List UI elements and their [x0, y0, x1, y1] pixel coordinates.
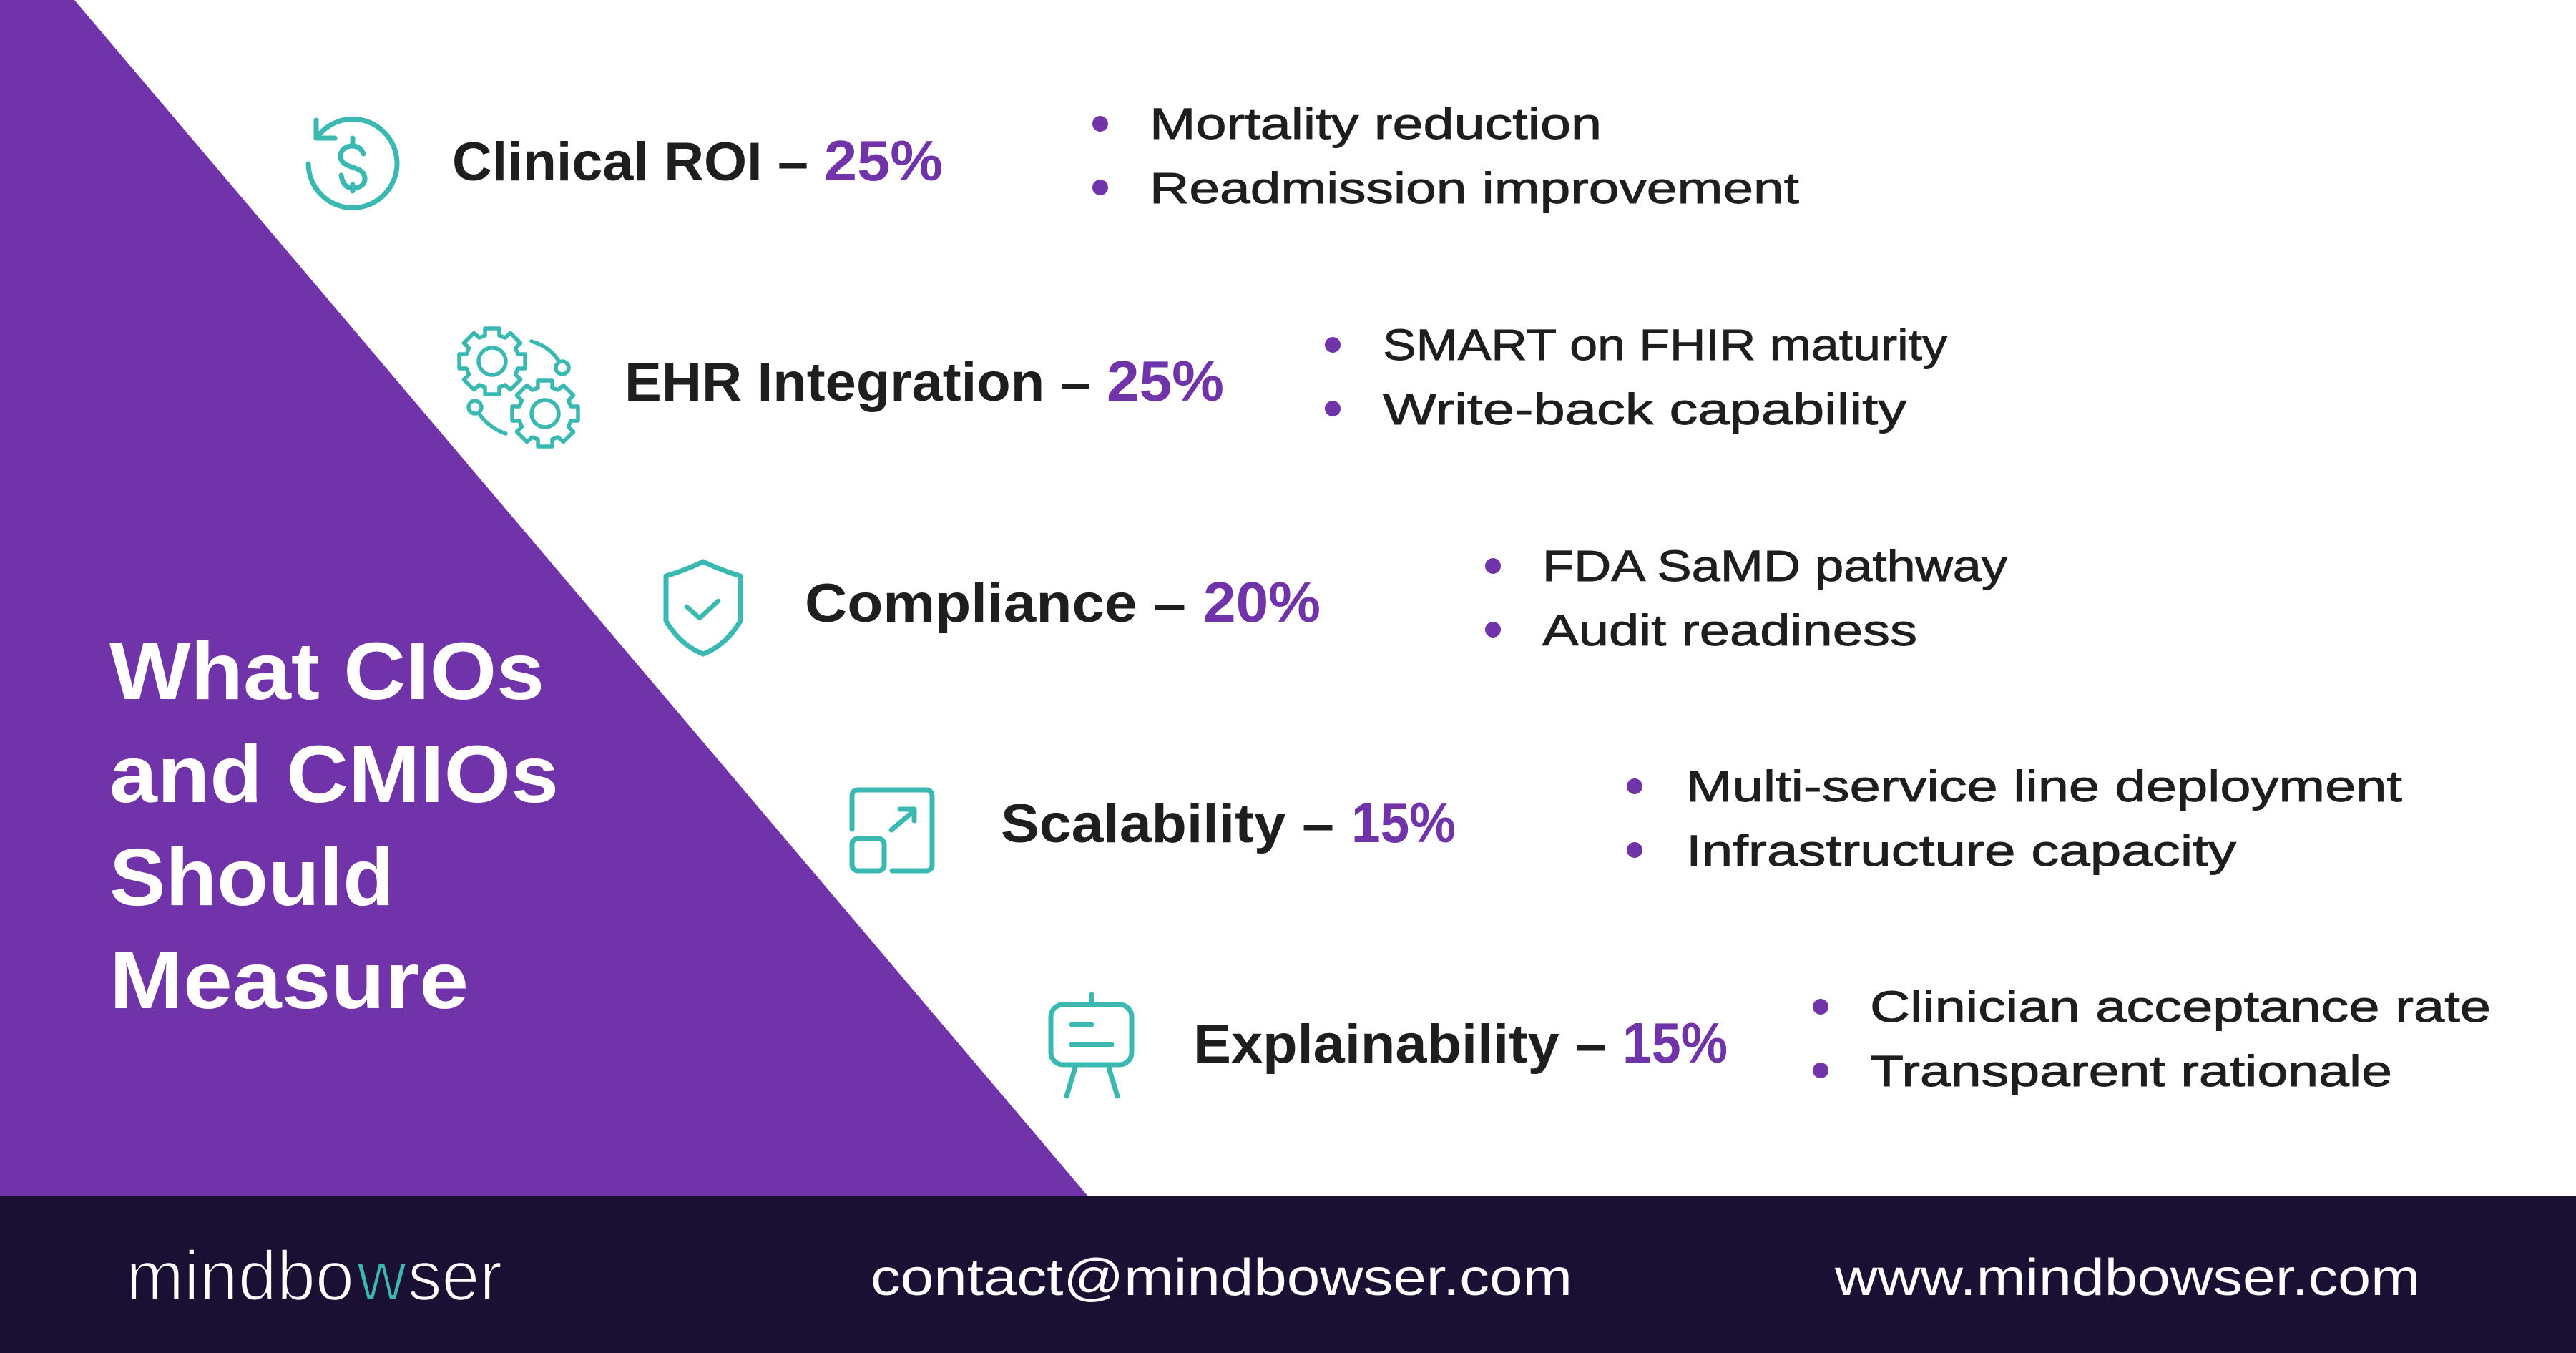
- heading: Compliance: 20%: [1203, 570, 1321, 634]
- logo: mindbowser: [126, 1236, 502, 1315]
- bullet list: Scalability: Infrastructure capacity: [1686, 826, 2237, 875]
- heading: Scalability: 15%: [1351, 791, 1456, 854]
- heading: Scalability: Scalability –: [1001, 793, 1334, 854]
- icon: dollar return: [308, 119, 397, 207]
- heading: EHR Integration: 25%: [1107, 349, 1224, 413]
- title: [109, 626, 559, 1025]
- panel: Explainability row: [1051, 982, 2491, 1096]
- bullet list: Explainability: [1813, 982, 2491, 1095]
- heading: Compliance: [805, 570, 1321, 634]
- bullet list: Compliance: Audit readiness: [1542, 606, 1917, 655]
- icon: expand: [852, 790, 932, 871]
- title: and CMIOs: [109, 729, 559, 819]
- logo: mindbowser: mindbo: [126, 1236, 354, 1315]
- heading: Scalability: [1001, 791, 1456, 854]
- title: What CIOs: [109, 626, 544, 716]
- icon: presentation easel: [1051, 995, 1132, 1096]
- panel: EHR Integration row: [459, 321, 1948, 446]
- bullet list: EHR Integration: [1325, 321, 1948, 434]
- bullet list: Explainability: Transparent rationale: [1870, 1047, 2392, 1095]
- bullet list: Clinical ROI: Mortality reduction: [1150, 99, 1602, 148]
- panel: Clinical ROI row: [308, 99, 1799, 213]
- title: Measure: [109, 935, 469, 1025]
- logo: mindbowser: w: [356, 1236, 407, 1315]
- website url: www.mindbowser.com: [1834, 1249, 2420, 1306]
- bullet list: EHR Integration: Write-back capability: [1383, 385, 1907, 434]
- panel: Scalability row: [852, 762, 2402, 875]
- bullet list: Compliance: [1485, 542, 2008, 655]
- footer bar: [0, 1196, 2576, 1353]
- logo: mindbowser: ser: [408, 1236, 502, 1315]
- bullet list: EHR Integration: SMART on FHIR maturity: [1383, 321, 1948, 369]
- heading: Clinical ROI: 25%: [824, 129, 943, 192]
- bullet list: Clinical ROI: [1092, 99, 1799, 213]
- heading: Compliance: Compliance –: [805, 573, 1186, 634]
- icon: gears: [459, 328, 578, 446]
- heading: Clinical ROI: Clinical ROI –: [452, 132, 808, 192]
- panel: Compliance row: [666, 542, 2008, 655]
- contact email: contact@mindbowser.com: [871, 1249, 1572, 1306]
- bullet list: Scalability: [1627, 762, 2402, 875]
- bullet list: Explainability: Clinician acceptance rate: [1870, 982, 2491, 1031]
- heading: Explainability: Explainability –: [1193, 1014, 1607, 1075]
- heading: Explainability: 15%: [1622, 1011, 1728, 1075]
- bullet list: Compliance: FDA SaMD pathway: [1542, 542, 2008, 590]
- purple triangle panel: [0, 0, 1088, 1196]
- heading: Clinical ROI: [452, 129, 943, 192]
- bullet list: Scalability: Multi-service line deployment: [1686, 762, 2402, 811]
- heading: EHR Integration: EHR Integration –: [625, 352, 1091, 413]
- icon: shield check: [666, 562, 740, 654]
- bullet list: Clinical ROI: Readmission improvement: [1150, 164, 1799, 213]
- title: Should: [109, 832, 394, 922]
